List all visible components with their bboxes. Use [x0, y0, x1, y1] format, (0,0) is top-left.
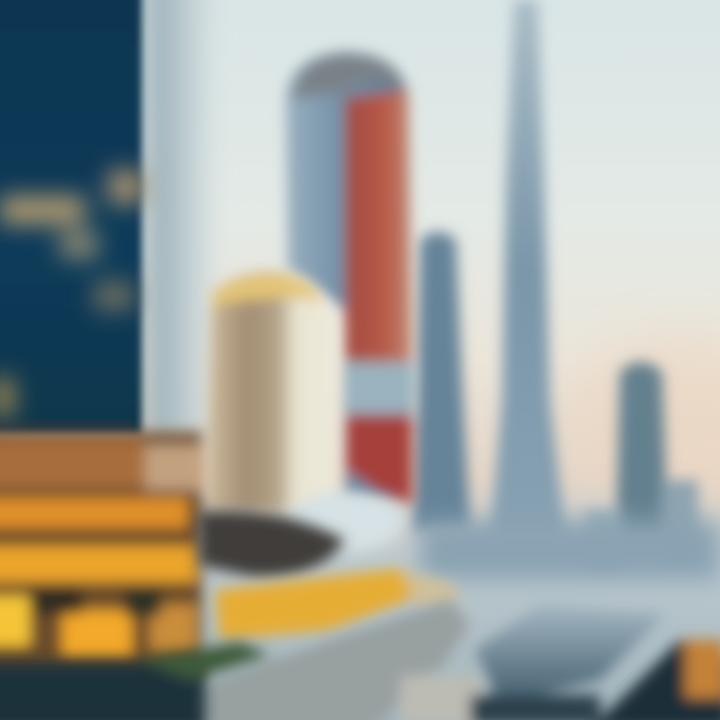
ground right buildings [400, 605, 720, 720]
white curved roof [287, 492, 403, 552]
right distant tower [585, 362, 698, 570]
tall spire tower [490, 0, 566, 540]
dark foreground base [0, 642, 270, 720]
glass tower beside dark tower [146, 0, 212, 440]
haze glow near horizon [570, 340, 720, 500]
yellow lit terrace [215, 568, 462, 640]
window lights [0, 170, 144, 416]
low buildings haze [420, 520, 720, 580]
golden podium [0, 432, 205, 682]
cream domed building [208, 272, 336, 510]
white sweeping roof [180, 600, 470, 720]
cylinder tower red and blue [286, 52, 415, 504]
middle narrow tower [414, 232, 470, 530]
dark blue tower with lights [0, 0, 144, 435]
dark curved canopy [198, 511, 345, 576]
